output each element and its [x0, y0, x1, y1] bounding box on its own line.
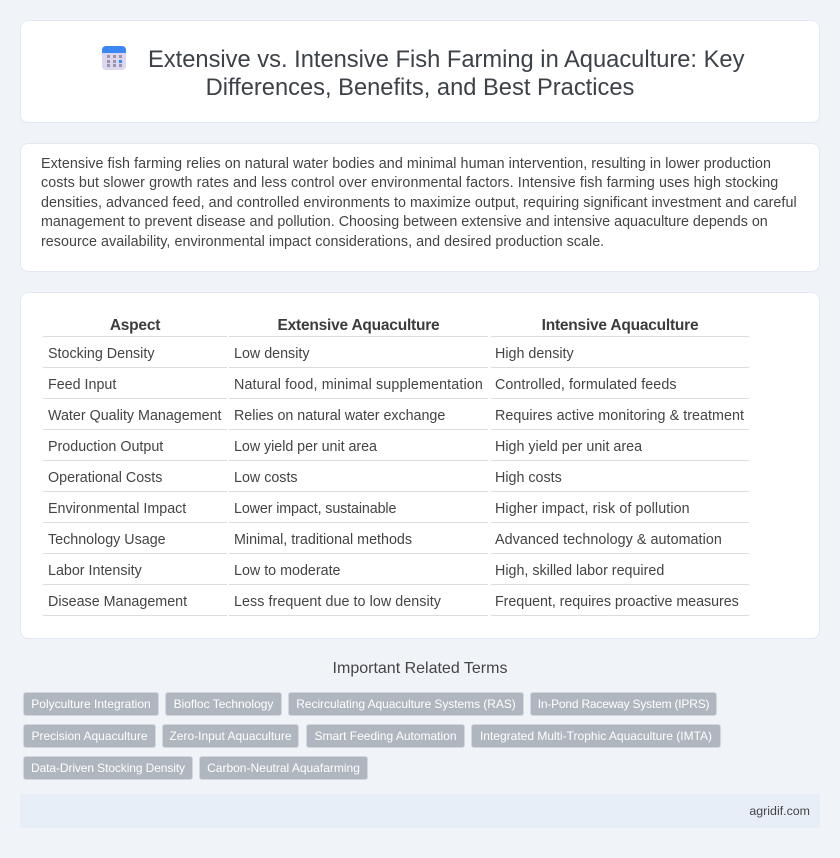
- panel: introduction: [20, 143, 820, 272]
- tag: [165, 692, 282, 716]
- tag: [306, 724, 465, 748]
- tag: [23, 756, 193, 780]
- row: production output: Production Output: [48, 439, 163, 455]
- row: technology usage: Technology Usage: [48, 532, 166, 548]
- intro paragraph: Extensive fish farming relies on natural water bodies and minimal human intervention, resulting in lower production: [41, 156, 771, 172]
- row: feed input: Feed Input: [48, 377, 116, 393]
- tag: Carbon-Neutral Aquafarming: [207, 761, 360, 775]
- row: technology usage intensive: Advanced technology & automation: [495, 532, 722, 548]
- tag: [162, 724, 299, 748]
- heading: related terms: Important Related Terms: [333, 660, 507, 677]
- tag: Biofloc Technology: [174, 697, 273, 711]
- row: stocking density: Stocking Density: [48, 346, 154, 362]
- panel: comparison table: [20, 292, 820, 639]
- intro paragraph: costs but slower growth rates and less control over environmental factors. Intensive fish farming uses high stocking: [41, 175, 778, 191]
- row: stocking density extensive: Low density: [234, 346, 310, 362]
- row: operational costs extensive: Low costs: [234, 470, 298, 486]
- row: operational costs: Operational Costs: [48, 470, 162, 486]
- tag: [471, 724, 721, 748]
- row: water quality extensive: Relies on natural water exchange: [234, 408, 445, 424]
- row: labor intensity: Labor Intensity: [48, 563, 142, 579]
- row: environmental impact: Environmental Impact: [48, 501, 186, 517]
- panel: title card: [20, 20, 820, 123]
- tag: Recirculating Aquaculture Systems (RAS): [296, 697, 516, 711]
- title line 2: Differences, Benefits, and Best Practices: [206, 75, 634, 101]
- row: feed input extensive: Natural food, minimal supplementation: [234, 377, 483, 393]
- row: environmental impact extensive: Lower impact, sustainable: [234, 501, 396, 517]
- row: water quality intensive: Requires active monitoring & treatment: [495, 408, 744, 424]
- row: disease management extensive: Less frequent due to low density: [234, 594, 441, 610]
- tag: [199, 756, 368, 780]
- row: labor intensity extensive: Low to moderate: [234, 563, 340, 579]
- tag: [288, 692, 524, 716]
- tag: Precision Aquaculture: [31, 729, 148, 743]
- tag: Smart Feeding Automation: [314, 729, 457, 743]
- tag: Integrated Multi-Trophic Aquaculture (IMTA): [480, 729, 712, 743]
- intro paragraph: [41, 156, 797, 250]
- intro paragraph: management to prevent disease and pollution. Choosing between extensive and intensive aquaculture depends on: [41, 214, 768, 230]
- row: production output extensive: Low yield per unit area: [234, 439, 377, 455]
- table header: aspect: Aspect: [110, 317, 160, 334]
- row: disease management intensive: Frequent, requires proactive measures: [495, 594, 739, 610]
- row: technology usage extensive: Minimal, traditional methods: [234, 532, 412, 548]
- row: disease management: Disease Management: [48, 594, 187, 610]
- row: labor intensity intensive: High, skilled labor required: [495, 563, 664, 579]
- tag: [23, 692, 159, 716]
- intro paragraph: densities, advanced feed, and controlled environments to maximize output, requiring significant investment and careful: [41, 195, 797, 211]
- table header: extensive: Extensive Aquaculture: [278, 317, 439, 334]
- row: operational costs intensive: High costs: [495, 470, 562, 486]
- footer bar: [20, 794, 820, 828]
- tag: [23, 724, 156, 748]
- footer credit: agridif.com: [749, 804, 810, 818]
- row: feed input intensive: Controlled, formulated feeds: [495, 377, 677, 393]
- intro paragraph: resource availability, environmental impact considerations, and desired production scale.: [41, 234, 604, 250]
- table header: intensive: Intensive Aquaculture: [542, 317, 698, 334]
- row: environmental impact intensive: Higher impact, risk of pollution: [495, 501, 690, 517]
- tag: Data-Driven Stocking Density: [31, 761, 185, 775]
- row: production output intensive: High yield per unit area: [495, 439, 642, 455]
- title line 1: Extensive vs. Intensive Fish Farming in Aquaculture: Key: [148, 47, 744, 73]
- row: stocking density intensive: High density: [495, 346, 574, 362]
- tag: [530, 692, 717, 716]
- tag: Polyculture Integration: [31, 697, 151, 711]
- tag: Zero-Input Aquaculture: [169, 729, 292, 743]
- tag: In-Pond Raceway System (IPRS): [538, 697, 709, 711]
- row: water quality: Water Quality Management: [48, 408, 222, 424]
- icon: calendar: [102, 46, 126, 70]
